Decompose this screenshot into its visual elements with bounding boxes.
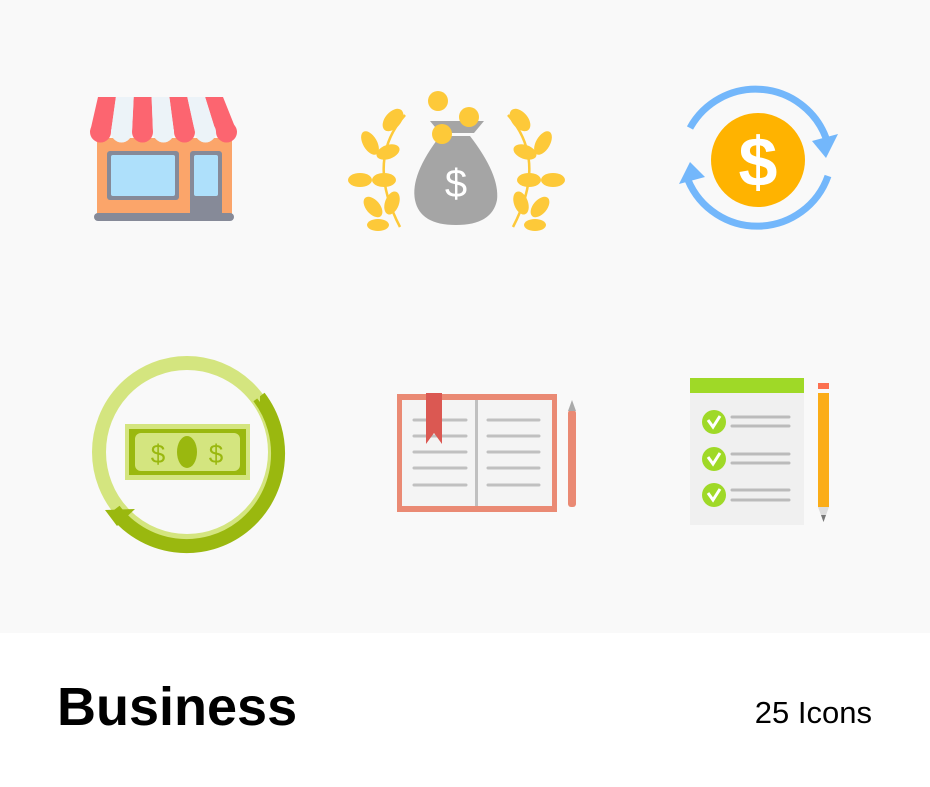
icon: money cycle: [99, 363, 278, 546]
icon: currency exchange: $: [739, 123, 777, 201]
icon: checklist with pencil: [690, 378, 829, 525]
icon: money cycle: $: [209, 439, 224, 469]
title: Business: [57, 677, 297, 737]
icon: store: [90, 97, 237, 221]
icon: money bag with laurels: [348, 91, 565, 231]
icon: money bag with laurels: $: [445, 162, 467, 206]
icon: open book with pencil: [397, 393, 576, 512]
icon count: 25 Icons: [755, 695, 872, 730]
icon: money cycle: $: [151, 439, 166, 469]
icon: currency exchange: [679, 89, 838, 226]
